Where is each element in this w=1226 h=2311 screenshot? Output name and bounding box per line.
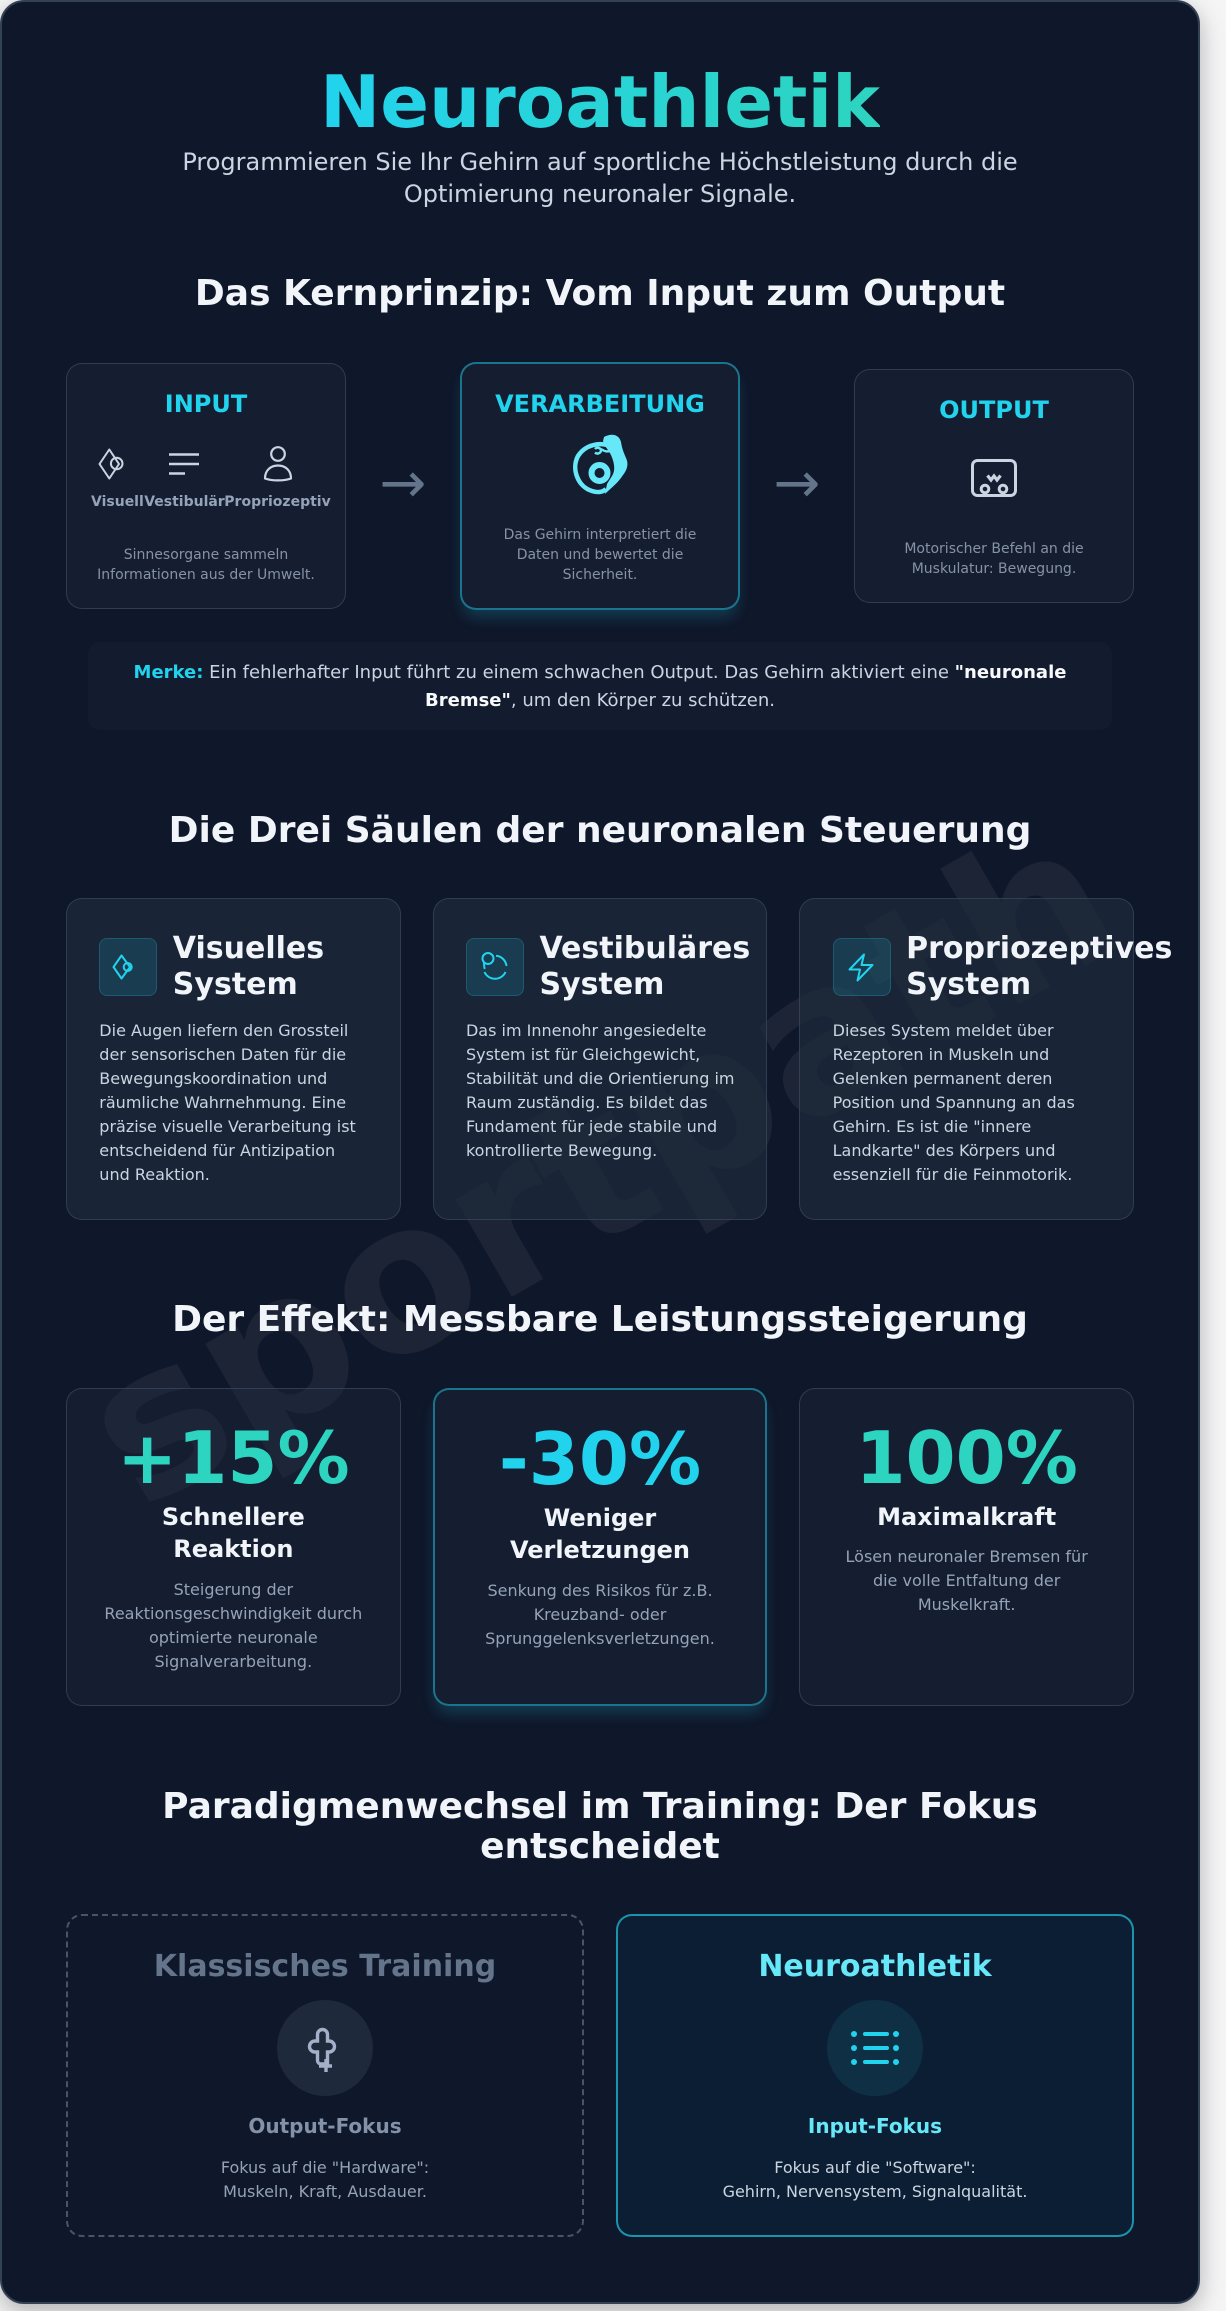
processing text: Sicherheit. [563, 567, 637, 583]
pillar text: Stabilität und die Orientierung im [466, 1068, 734, 1088]
heading: Paradigmenwechsel: Paradigmenwechsel im Training: Der Fokus [162, 1786, 1038, 1827]
pillar text: Gelenken permanent deren [833, 1068, 1052, 1088]
pillar text: Dieses System meldet über [833, 1020, 1054, 1040]
pillar title: System [539, 967, 664, 1002]
icon: visual [98, 448, 124, 480]
icon: proprioceptive [264, 446, 292, 482]
pillar text: der sensorischen Daten für die [99, 1044, 346, 1064]
stat title: Weniger [544, 1504, 656, 1532]
heading: Paradigmenwechsel: entscheidet [480, 1826, 720, 1867]
label: Visuell: Visuell [91, 494, 144, 510]
stat number: 100% [855, 1416, 1078, 1500]
callout: Merke [88, 642, 1112, 730]
panel: processing [460, 362, 740, 610]
stat title [162, 1503, 305, 1563]
classic text: Fokus auf die "Hardware": [221, 2158, 429, 2176]
icon: visual [99, 938, 157, 996]
pillar text: Landkarte" des Körpers und [833, 1140, 1056, 1160]
processing heading: VERARBEITUNG [495, 390, 705, 418]
subtitle [182, 148, 1018, 208]
arrow: input to processing: → [380, 451, 426, 516]
pillar text: Bewegungskoordination und [99, 1068, 327, 1088]
stat text: Lösen neuronaler Bremsen für [846, 1547, 1088, 1566]
callout: Merke: Bremse", um den Körper zu schützen. [425, 690, 775, 711]
panel: visual system [66, 898, 401, 1220]
pillar text: System ist für Gleichgewicht, [466, 1044, 700, 1064]
input text: Sinnesorgane sammeln [124, 547, 288, 563]
input heading: INPUT [165, 390, 247, 418]
stat text [846, 1547, 1088, 1614]
processing text: Das Gehirn interpretiert die [504, 527, 696, 543]
pillar text: Die Augen liefern den Grossteil [99, 1020, 348, 1040]
panel: output [854, 369, 1134, 603]
label: Propriozeptiv: Propriozeptiv [224, 494, 331, 510]
pillar text: Position und Spannung an das [833, 1092, 1075, 1112]
pillar text: und Reaktion. [99, 1164, 210, 1184]
heading: Effekt: Der Effekt: Messbare Leistungssteigerung [172, 1299, 1028, 1340]
title: Neuroathletik [320, 60, 880, 144]
neuro text [723, 2158, 1027, 2200]
classic subtitle: Output-Fokus [248, 2114, 402, 2138]
pillar title: System [173, 967, 298, 1002]
stat title: Maximalkraft [877, 1503, 1056, 1531]
icon: vestibular [169, 453, 199, 475]
input text: Informationen aus der Umwelt. [97, 567, 315, 583]
pillar text: Fundament für jede stabile und [466, 1116, 717, 1136]
stat text: die volle Entfaltung der [873, 1571, 1060, 1590]
neuro subtitle: Input-Fokus [808, 2114, 942, 2138]
neuro text: Fokus auf die "Software": [774, 2158, 976, 2176]
pillar title [906, 931, 1172, 1002]
stat card: reaction [66, 1388, 401, 1706]
stat title: Reaktion [173, 1535, 293, 1563]
label: Vestibulär: Vestibulär [144, 494, 225, 510]
neuro text: Gehirn, Nervensystem, Signalqualität. [723, 2182, 1027, 2200]
pillar title: Propriozeptives [906, 931, 1172, 966]
pillar text: essenziell für die Feinmotorik. [833, 1164, 1072, 1184]
output text [904, 541, 1084, 577]
classic text: Muskeln, Kraft, Ausdauer. [223, 2182, 427, 2200]
heading: Kernprinzip: Das Kernprinzip: Vom Input zum Output [195, 273, 1005, 314]
output text: Motorischer Befehl an die [904, 541, 1084, 557]
subtitle: Optimierung neuronaler Signale. [404, 180, 796, 208]
stat text [485, 1580, 715, 1648]
pillar title [172, 931, 324, 1002]
stat text: Muskelkraft. [918, 1595, 1015, 1614]
pillar text [466, 1020, 734, 1160]
classic text [221, 2158, 429, 2200]
panel: classic training [66, 1914, 584, 2237]
heading: Drei Säulen: Die Drei Säulen der neuronalen Steuerung [169, 810, 1031, 851]
stat text: Kreuzband- oder [534, 1604, 666, 1624]
pillar text: Raum zuständig. Es bildet das [466, 1092, 708, 1112]
stat card: max strength [799, 1388, 1134, 1706]
pillar text [833, 1020, 1075, 1184]
pillar title: System [906, 967, 1031, 1002]
pillar text: kontrollierte Bewegung. [466, 1140, 657, 1160]
icon: brain [573, 434, 628, 494]
stat title: Schnellere [162, 1503, 305, 1531]
stat card: injuries [433, 1388, 767, 1706]
pillar text: Rezeptoren in Muskeln und [833, 1044, 1049, 1064]
watermark: sportpath [45, 774, 1155, 1554]
stat text: Reaktionsgeschwindigkeit durch [104, 1604, 362, 1622]
icon: lightning [833, 938, 891, 996]
panel: vestibular system [433, 898, 767, 1220]
callout: Merke: Merke: Ein fehlerhafter Input führt zu einem schwachen Output. Das Gehirn aktiviert eine "neuronale [134, 662, 1066, 683]
panel: input [66, 363, 346, 609]
icon: vestibular [466, 938, 524, 996]
stat title: Verletzungen [510, 1536, 690, 1564]
output text: Muskulatur: Bewegung. [912, 561, 1076, 577]
processing text [504, 527, 696, 583]
arrow: processing to output: → [774, 451, 820, 516]
stat number: -30% [499, 1417, 701, 1501]
output heading: OUTPUT [939, 396, 1049, 424]
stat number: +15% [117, 1416, 350, 1500]
pillar text [99, 1020, 356, 1184]
pillar text: Gehirn. Es ist die "innere [833, 1116, 1031, 1136]
stat text: Steigerung der [174, 1580, 293, 1598]
stat text [104, 1580, 362, 1670]
subtitle: Programmieren Sie Ihr Gehirn auf sportliche Höchstleistung durch die [182, 148, 1018, 176]
pillar title: Vestibuläres [539, 931, 750, 966]
stat text: Signalverarbeitung. [154, 1652, 312, 1670]
pillar title [539, 931, 750, 1002]
pillar text: räumliche Wahrnehmung. Eine [99, 1092, 346, 1112]
stat text: Sprunggelenksverletzungen. [485, 1628, 715, 1648]
panel: neuroathletics [616, 1914, 1134, 2237]
stat text: optimierte neuronale [149, 1628, 318, 1646]
heading: Paradigmenwechsel [162, 1786, 1038, 1867]
icon: signal list [827, 2000, 923, 2096]
pillar text: entscheidend für Antizipation [99, 1140, 335, 1160]
pillar text: präzise visuelle Verarbeitung ist [99, 1116, 356, 1136]
input text [97, 547, 315, 583]
icon: motor [971, 459, 1017, 497]
pillar text: Das im Innenohr angesiedelte [466, 1020, 706, 1040]
classic title: Klassisches Training [154, 1949, 496, 1984]
pillar title: Visuelles [173, 931, 324, 966]
stat title [510, 1504, 690, 1564]
neuro title: Neuroathletik [758, 1949, 992, 1984]
panel: proprioceptive system [799, 898, 1134, 1220]
stat text: Senkung des Risikos für z.B. [487, 1580, 713, 1600]
processing text: Daten und bewertet die [517, 547, 683, 563]
icon: dumbbell [277, 2000, 373, 2096]
